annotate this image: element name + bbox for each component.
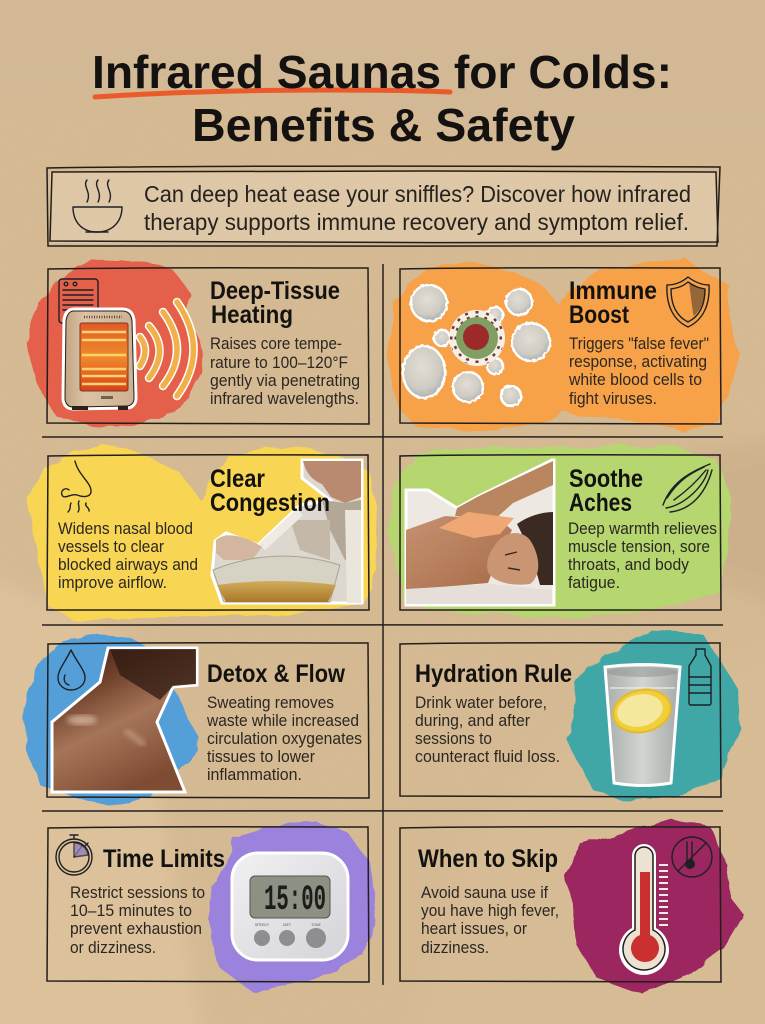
digital timer: 15:00 [264,880,326,920]
icon: no thermometer [672,837,712,877]
body text: white blood cells to [568,371,702,389]
heading [569,277,657,329]
heading: Immune [569,277,657,305]
body text: waste while increased [206,712,359,730]
heading: Hydration Rule [415,660,572,688]
title: Benefits & Safety [192,99,575,151]
intro text: therapy supports immune recovery and symptom relief. [144,209,689,235]
digital timer: TONE [311,923,321,927]
body text: muscle tension, sore [568,538,710,556]
body text: Raises core tempe- [210,335,342,353]
body text [568,335,709,408]
body text: 10–15 minutes to [70,902,192,920]
body text: infrared wavelengths. [210,390,359,408]
glass of lemon water [605,664,680,786]
digital timer: DIET [283,923,292,927]
body text: fatigue. [568,574,620,592]
heading [210,277,340,329]
panel: clear congestion [28,443,378,620]
body text [206,694,362,784]
body text: Sweating removes [207,694,334,712]
body text: fight viruses. [569,390,657,408]
icon: shield [667,277,709,327]
body text: Avoid sauna use if [421,884,548,902]
digital timer [232,853,348,960]
heading: Detox & Flow [207,660,345,688]
body text: circulation oxygenates [207,730,362,748]
heading: Deep-Tissue [210,277,340,305]
body text [415,694,560,766]
digital timer: SPEEDY [255,923,270,927]
body text: dizziness. [421,939,489,957]
panel: hydration rule [400,630,741,802]
icon: water bottle [689,649,711,705]
heading [569,465,643,517]
body text: prevent exhaustion [70,920,202,938]
body text [210,335,360,408]
body text [70,884,205,957]
body text: improve airflow. [58,574,167,592]
massage photo [406,460,554,605]
panel: soothe aches [391,447,731,617]
body text: inflammation. [207,766,302,784]
panel: time limits [47,822,377,992]
heading: Clear [210,465,265,493]
intro text: Can deep heat ease your sniffles? Discover how infrared [144,181,691,207]
icon: sketched heater [59,279,98,323]
body text: blocked airways and [58,556,198,574]
body text [58,520,198,592]
icon: nose [62,461,91,512]
intro box [47,166,720,246]
icon: stopwatch [56,835,92,875]
body text: response, activating [569,353,707,371]
body text: Drink water before, [415,694,547,712]
body text: Restrict sessions to [70,884,205,902]
body text: gently via penetrating [210,372,360,390]
heading: Soothe [569,465,643,493]
heading: Congestion [210,489,330,517]
panel: when to skip [400,818,744,995]
body text: rature to 100–120°F [210,354,348,372]
white blood cells and virus [403,285,550,406]
thermometer [619,844,669,975]
heading: Aches [569,489,632,517]
body text: tissues to lower [207,748,315,766]
heading: When to Skip [418,845,558,873]
steam inhalation photo [212,460,362,603]
body text: throats, and body [568,556,690,574]
panel: deep-tissue heating [27,260,369,428]
intro text [144,181,691,235]
heat waves [140,302,194,396]
heading [210,465,330,517]
body text: or dizziness. [70,939,156,957]
body text: counteract fluid loss. [415,748,560,766]
heading: Time Limits [103,845,225,873]
icon: steaming bowl [73,180,122,232]
title: Infrared Saunas for Colds: [92,46,672,98]
body text [568,520,717,592]
body text: during, and after [415,712,530,730]
panel: immune boost [387,257,739,432]
icon: water drop [58,650,85,690]
icon: muscle [663,464,712,512]
sweaty shoulder photo [52,648,197,792]
panel: detox and flow [23,635,369,808]
heater illustration [63,309,136,409]
body text: you have high fever, [421,902,559,920]
body text: vessels to clear [58,538,164,556]
body text: Deep warmth relieves [568,520,717,538]
title [92,46,672,151]
heading: Boost [569,301,630,329]
body text: Triggers "false fever" [569,335,709,353]
body text: heart issues, or [421,920,527,938]
heading: Heating [211,301,293,329]
body text [421,884,559,957]
body text: Widens nasal blood [58,520,193,538]
body text: sessions to [415,730,492,748]
